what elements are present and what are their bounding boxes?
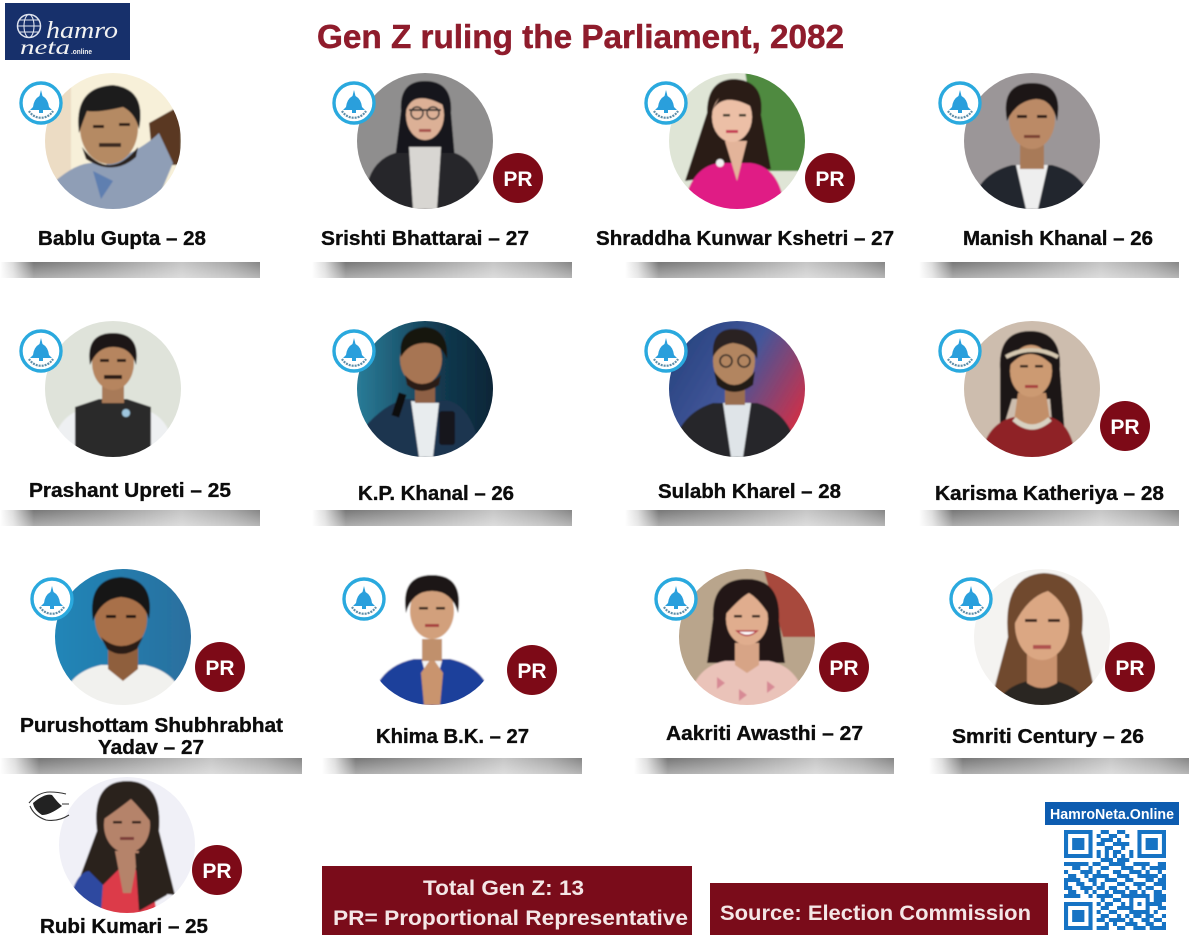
portrait — [355, 319, 495, 459]
divider bar — [312, 510, 572, 526]
name: Karisma Katheriya – 28 — [935, 483, 1164, 505]
portrait — [355, 71, 495, 211]
PR badge — [192, 845, 242, 895]
party logo — [32, 579, 72, 619]
divider bar — [919, 262, 1179, 278]
PR badge: PR — [815, 168, 845, 191]
PR badge: PR — [1115, 657, 1145, 680]
name: Bablu Gupta – 28 — [38, 228, 206, 250]
card: Shraddha Kunwar Kshetri — [596, 71, 894, 278]
card: Srishti Bhattarai — [312, 71, 572, 278]
logo: Hamro Neta — [5, 3, 130, 60]
portrait — [667, 319, 807, 459]
party logo — [646, 83, 686, 123]
title: Gen Z ruling the Parliament, 2082 — [317, 18, 844, 55]
card: Sulabh Kharel — [625, 319, 885, 526]
divider bar — [929, 758, 1189, 774]
PR badge — [805, 153, 855, 203]
party logo — [940, 331, 980, 371]
QR code — [1064, 830, 1166, 930]
PR badge — [507, 645, 557, 695]
name: Shraddha Kunwar Kshetri – 27 — [596, 228, 894, 250]
PR badge: PR — [503, 168, 533, 191]
PR badge — [819, 642, 869, 692]
logo: Hamro Neta: hamro — [46, 18, 118, 44]
name: Yadav – 27 — [98, 737, 204, 759]
portrait — [677, 567, 817, 707]
divider bar — [0, 758, 302, 774]
card: Smriti Century — [929, 567, 1189, 774]
party logo — [334, 331, 374, 371]
source box — [710, 883, 1048, 935]
party logo — [646, 331, 686, 371]
name: K.P. Khanal – 26 — [358, 483, 514, 505]
name: Srishti Bhattarai – 27 — [321, 228, 529, 250]
portrait — [972, 567, 1112, 707]
name: Purushottam Shubhrabhat — [20, 715, 283, 737]
card: Purushottam Shubhrabhat Yadav — [0, 567, 302, 774]
card: Rubi Kumari — [29, 775, 242, 938]
divider bar — [0, 510, 260, 526]
PR badge — [1105, 642, 1155, 692]
name: Khima B.K. – 27 — [376, 726, 529, 748]
card: Aakriti Awasthi — [634, 567, 894, 774]
divider bar — [0, 262, 260, 278]
PR badge: PR — [205, 657, 235, 680]
divider bar — [312, 262, 572, 278]
QR label — [1045, 802, 1179, 825]
summary box: Total Gen Z: 13 — [423, 877, 584, 900]
divider bar — [919, 510, 1179, 526]
divider bar — [322, 758, 582, 774]
party logo — [940, 83, 980, 123]
portrait — [379, 574, 485, 705]
PR badge — [493, 153, 543, 203]
party logo — [21, 83, 61, 123]
PR badge: PR — [517, 660, 547, 683]
card: Bablu Gupta — [0, 71, 260, 278]
portrait — [57, 775, 197, 915]
party logo — [656, 579, 696, 619]
summary box — [322, 866, 692, 935]
name: Aakriti Awasthi – 27 — [666, 723, 863, 745]
PR badge: PR — [1110, 416, 1140, 439]
PR badge — [195, 642, 245, 692]
party logo — [951, 579, 991, 619]
name: Prashant Upreti – 25 — [29, 480, 231, 502]
party logo — [334, 83, 374, 123]
card: K.P. Khanal — [312, 319, 572, 526]
card: Khima B.K. — [322, 567, 582, 774]
PR badge: PR — [829, 657, 859, 680]
PR badge: PR — [202, 860, 232, 883]
PR badge — [1100, 401, 1150, 451]
name: Manish Khanal – 26 — [963, 228, 1153, 250]
name: Sulabh Kharel – 28 — [658, 481, 841, 503]
source box: Source: Election Commission — [720, 902, 1031, 925]
portrait — [43, 319, 183, 459]
portrait — [53, 567, 193, 707]
party logo: hand — [29, 792, 69, 820]
card: Manish Khanal — [919, 71, 1179, 278]
portrait — [667, 71, 807, 211]
party logo — [21, 331, 61, 371]
divider bar — [634, 758, 894, 774]
name: Smriti Century – 26 — [952, 726, 1144, 748]
summary box: PR= Proportional Representative — [333, 907, 688, 930]
logo: Hamro Neta: .online — [71, 47, 92, 56]
party logo — [344, 579, 384, 619]
card: Karisma Katheriya — [919, 319, 1179, 526]
logo: Hamro Neta: neta — [20, 35, 70, 59]
card: Prashant Upreti — [0, 319, 260, 526]
QR label: HamroNeta.Online — [1050, 807, 1174, 823]
portrait — [43, 71, 183, 211]
name — [20, 715, 283, 759]
name: Rubi Kumari – 25 — [40, 916, 208, 938]
portrait — [962, 319, 1102, 459]
divider bar — [625, 262, 885, 278]
divider bar — [625, 510, 885, 526]
portrait — [962, 71, 1102, 211]
